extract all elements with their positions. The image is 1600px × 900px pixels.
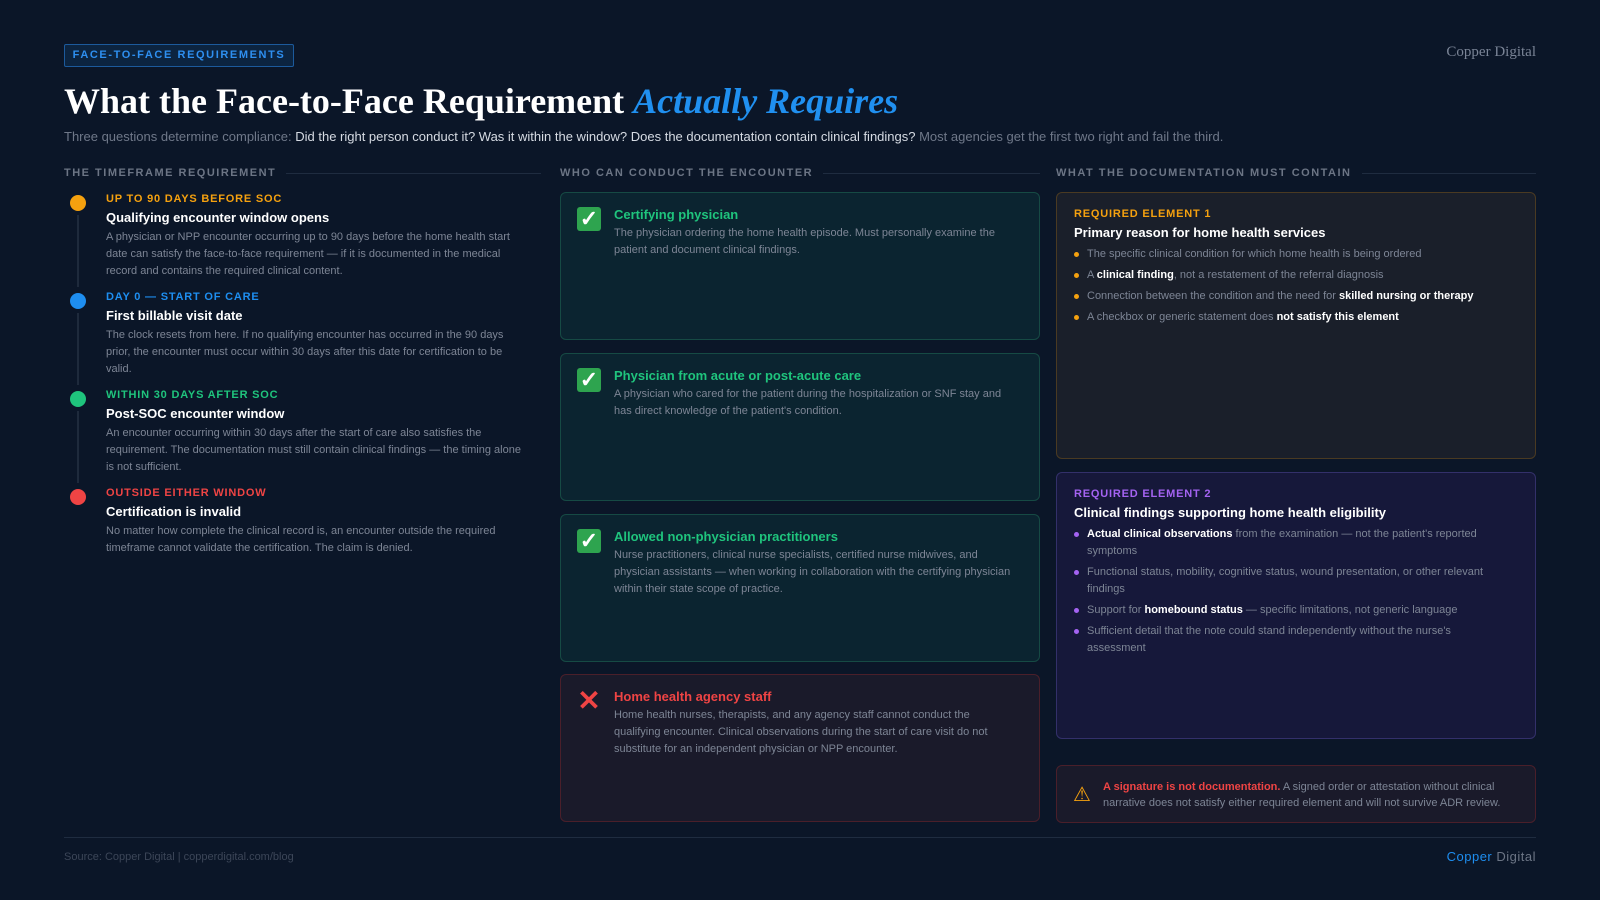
- timeline item 2: DAY 0 — START OF CARE: [106, 291, 260, 303]
- timeline item 4: OUTSIDE EITHER WINDOW: [106, 487, 266, 499]
- panel: required element 2: Functional status, mobility, cognitive status, wound presentation, or other relevant findings: [1087, 566, 1483, 595]
- brand top: Copper Digital: [1446, 44, 1536, 60]
- icon: warning: ⚠: [1073, 784, 1091, 806]
- timeline item 2: First billable visit date: [106, 308, 243, 323]
- card: non-physician practitioners: Allowed non-physician practitioners: [614, 529, 838, 544]
- subtitle: Three questions determine compliance: Did the right person conduct it? Was it within the window? Does the documentation contain clinical findings? Most agencies get the first two right and fail the third.: [64, 129, 1223, 144]
- timeline item 4: [70, 487, 496, 554]
- timeline item 2: The clock resets from here. If no qualifying encounter has occurred in the 90 days prior, the encounter must occur within 30 days after this date for certification to be valid.: [106, 329, 503, 375]
- panel: required element 1: The specific clinical condition for which home health is being ordered: [1087, 248, 1421, 260]
- panel: required element 2: Support for homebound status — specific limitations, not generic language: [1087, 604, 1458, 616]
- title: What the Face-to-Face Requirement Actually Requires: [64, 81, 898, 121]
- panel: required element 2: REQUIRED ELEMENT 2: [1074, 488, 1211, 500]
- card: acute/post-acute physician: A physician who cared for the patient during the hospitalization or SNF stay and has direct knowledge of the patient's condition.: [614, 388, 1001, 417]
- card: certifying physician: Certifying physician: [614, 207, 738, 222]
- card: acute/post-acute physician: Physician from acute or post-acute care: [614, 368, 861, 383]
- section heading: timeframe: THE TIMEFRAME REQUIREMENT: [64, 167, 276, 179]
- timeline item 4: No matter how complete the clinical record is, an encounter outside the required timeframe cannot validate the certification. The claim is denied.: [106, 525, 496, 554]
- card: agency staff (not allowed): Home health nurses, therapists, and any agency staff cannot conduct the qualifying encounter. Clinical observations during the start of care visit do not substitute for an independent physician or NPP encounter.: [614, 709, 988, 755]
- section heading: who: WHO CAN CONDUCT THE ENCOUNTER: [560, 167, 813, 179]
- panel: required element 1: REQUIRED ELEMENT 1: [1074, 208, 1211, 220]
- timeline item 3: An encounter occurring within 30 days after the start of care also satisfies the requirement. The documentation must still contain clinical findings — the timing alone is not sufficient.: [106, 427, 521, 473]
- panel: required element 1: Primary reason for home health services: [1074, 225, 1325, 240]
- card: non-physician practitioners: [560, 514, 1040, 662]
- card: certifying physician: The physician ordering the home health episode. Must personally examine the patient and document clinical findings.: [614, 227, 995, 256]
- footer brand: Copper Digital: [1447, 849, 1536, 864]
- timeline item 4: Certification is invalid: [106, 504, 241, 519]
- panel: required element 1: Connection between the condition and the need for skilled nursing or therapy: [1087, 290, 1473, 302]
- footer source: Source: Copper Digital | copperdigital.com/blog: [64, 851, 294, 863]
- card: agency staff (not allowed): Home health agency staff: [614, 689, 772, 704]
- timeline item 1: [70, 193, 510, 287]
- timeline item 1: Qualifying encounter window opens: [106, 210, 329, 225]
- panel: required element 2: Sufficient detail that the note could stand independently without the nurse's assessment: [1087, 625, 1451, 654]
- card: agency staff (not allowed): [560, 674, 1040, 822]
- card: acute/post-acute physician: [560, 353, 1040, 501]
- card: certifying physician: [560, 192, 1040, 340]
- panel: required element 2: [1056, 472, 1536, 739]
- card: non-physician practitioners: Nurse practitioners, clinical nurse specialists, certified nurse midwives, and physician assistants — when working in collaboration with the certifying physician within their state scope of practice.: [614, 549, 1010, 595]
- timeline item 3: WITHIN 30 DAYS AFTER SOC: [106, 389, 278, 401]
- panel: timeline: [70, 193, 521, 554]
- panel: required element 2: Actual clinical observations from the examination — not the patient's reported symptoms: [1087, 528, 1477, 557]
- panel: required element 1: [1056, 192, 1536, 459]
- panel: required element 2: Clinical findings supporting home health eligibility: [1074, 505, 1386, 520]
- timeline item 2: [70, 291, 503, 385]
- card: acute/post-acute physician: ✓: [580, 367, 598, 392]
- panel: required element 1: A checkbox or generic statement does not satisfy this element: [1087, 311, 1399, 323]
- card: agency staff (not allowed): ✕: [577, 685, 601, 716]
- callout: signature warning: [1056, 765, 1536, 823]
- timeline item 3: [70, 389, 521, 483]
- timeline item 1: A physician or NPP encounter occurring up to 90 days before the home health start date can satisfy the face-to-face requirement — if it is documented in the medical record and contains the required clinical content.: [106, 231, 510, 277]
- panel: required element 1: A clinical finding, not a restatement of the referral diagnosis: [1087, 269, 1384, 281]
- timeline item 3: Post-SOC encounter window: [106, 406, 284, 421]
- timeline item 1: UP TO 90 DAYS BEFORE SOC: [106, 193, 282, 205]
- badge: FACE-TO-FACE REQUIREMENTS: [73, 49, 285, 61]
- badge: [64, 44, 294, 67]
- section heading: documentation: WHAT THE DOCUMENTATION MUST CONTAIN: [1056, 167, 1352, 179]
- card: non-physician practitioners: ✓: [580, 528, 598, 553]
- card: certifying physician: ✓: [580, 206, 598, 231]
- callout: signature warning: A signature is not documentation. A signed order or attestation without clinical narrative does not satisfy either required element and will not survive ADR review.: [1103, 781, 1500, 809]
